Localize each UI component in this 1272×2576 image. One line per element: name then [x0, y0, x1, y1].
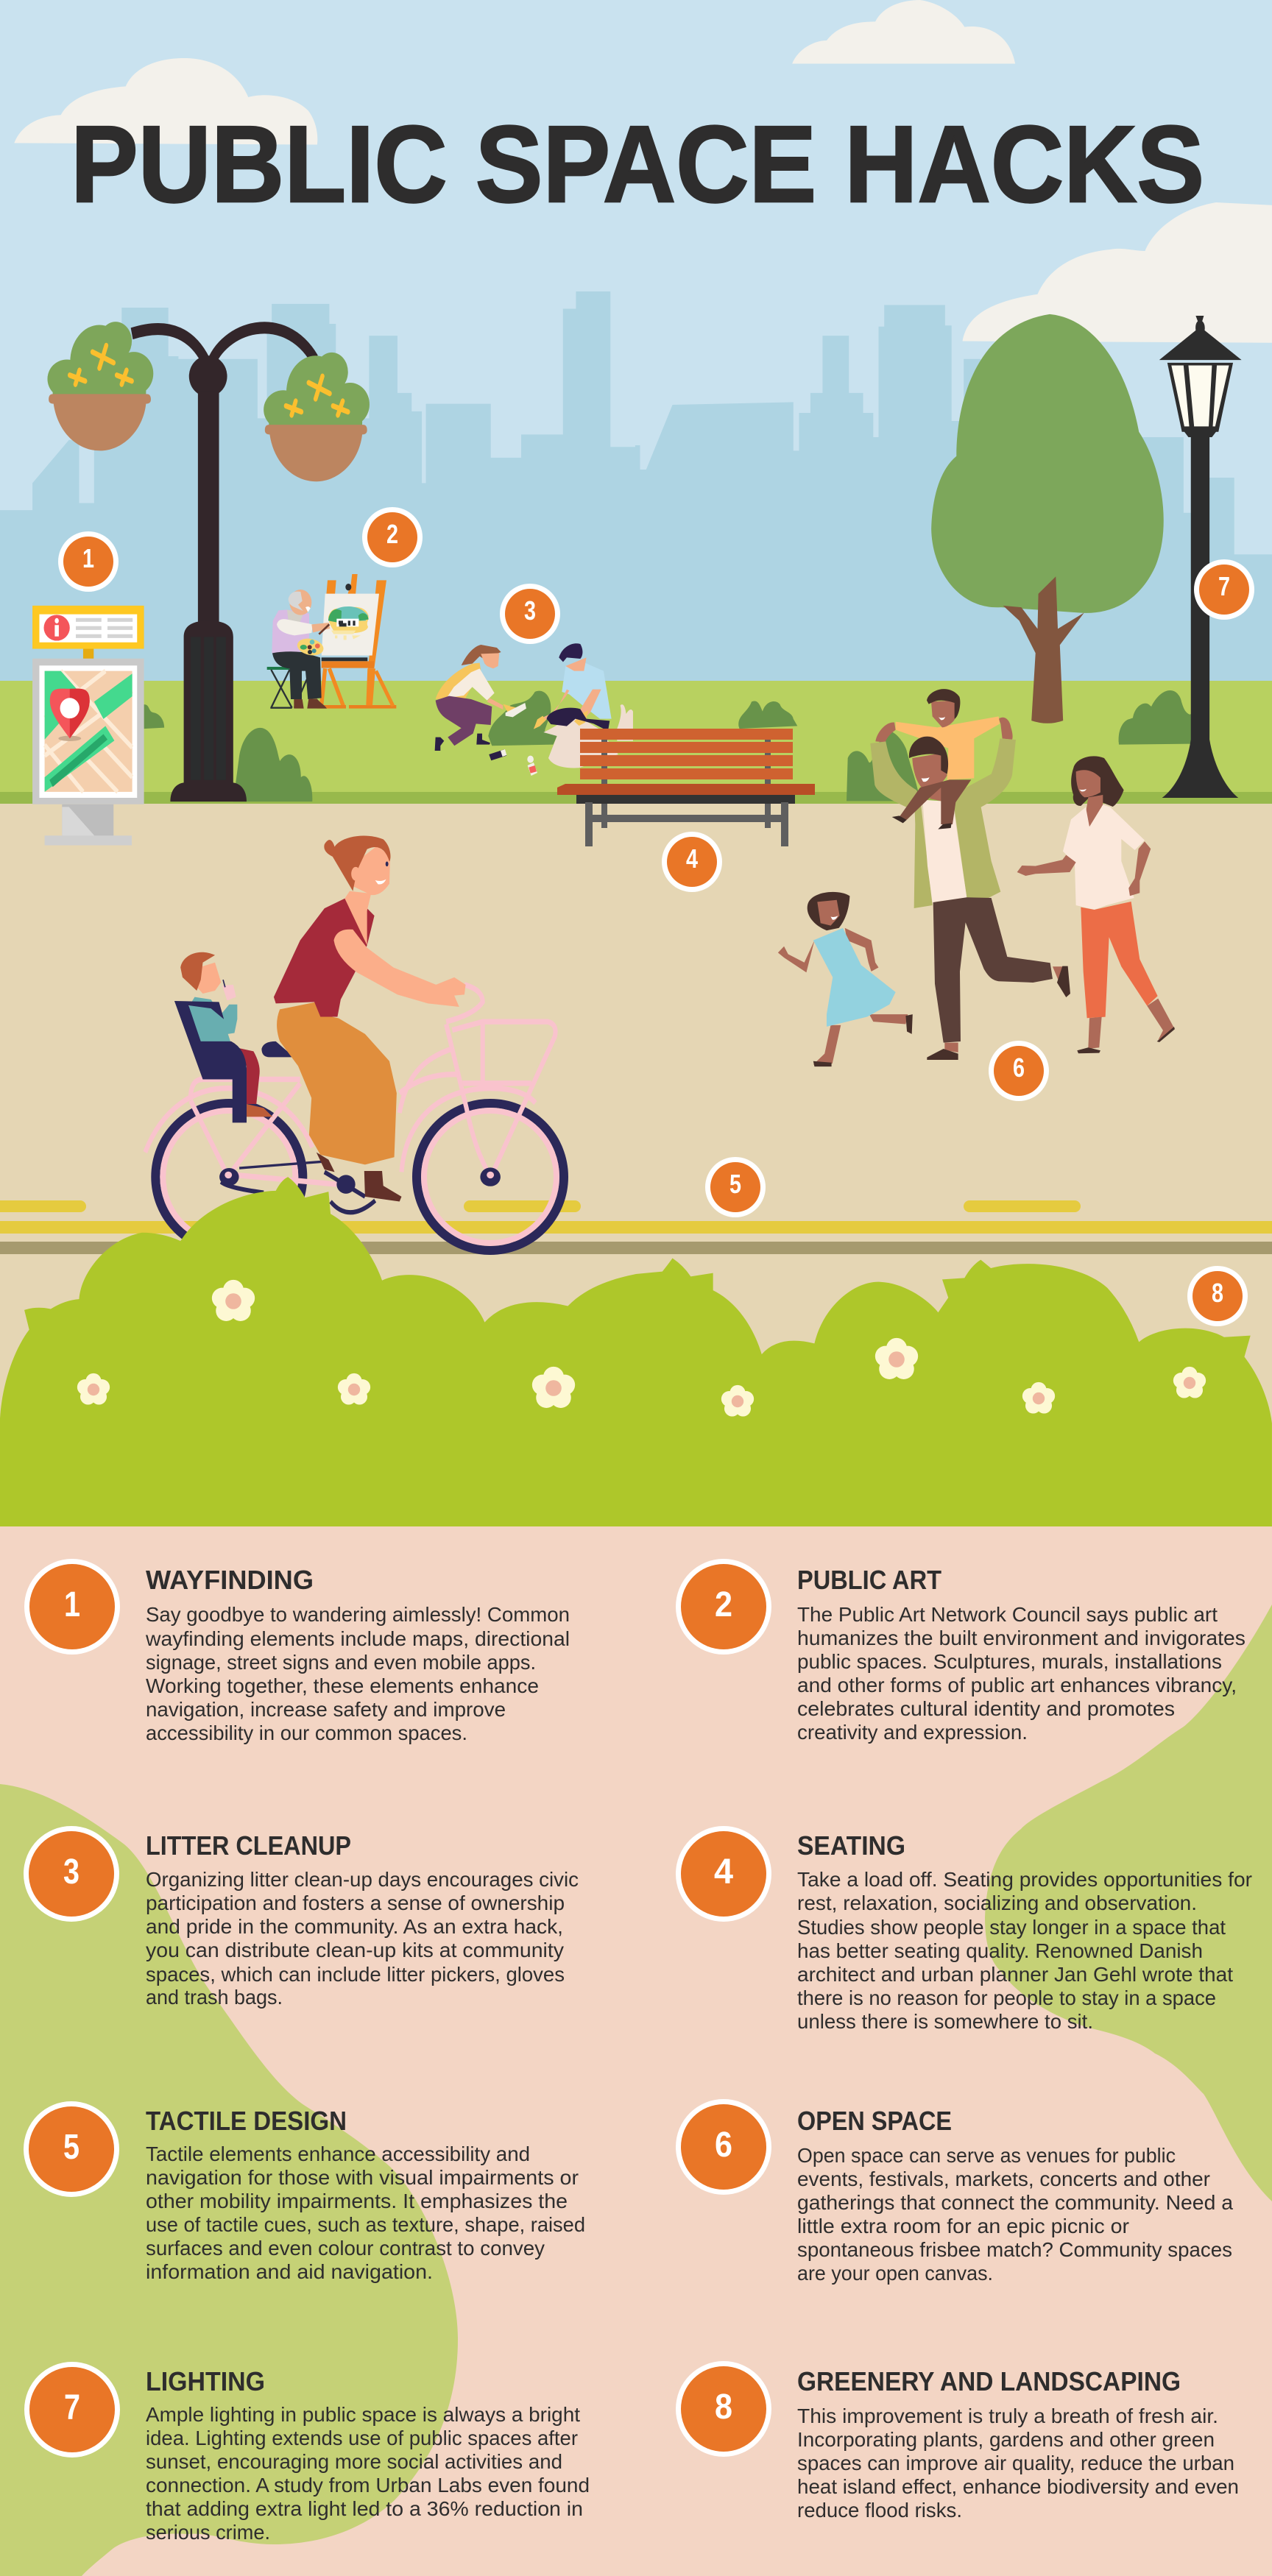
- scene marker 8: 8: [1212, 1278, 1223, 1308]
- body text: and other forms of public art enhances vibrancy,: [797, 1674, 1237, 1696]
- badge 4: [676, 1826, 771, 1922]
- body text: participation and fosters a sense of ownership: [146, 1892, 565, 1914]
- body text: public spaces. Sculptures, murals, installations: [797, 1650, 1222, 1673]
- badge 1: [24, 1559, 120, 1655]
- painter at easel: [267, 574, 396, 709]
- badge 5: 5: [63, 2128, 80, 2167]
- body text: spontaneous frisbee match? Community spaces: [797, 2238, 1232, 2261]
- scene marker 6: [989, 1041, 1049, 1101]
- right lamp post: [1159, 316, 1242, 798]
- heading: TACTILE DESIGN: [146, 2106, 347, 2136]
- body text: little extra room for an epic picnic or: [797, 2215, 1129, 2237]
- panel: wayfinding: [24, 1559, 570, 1744]
- body text: Say goodbye to wandering aimlessly! Common: [146, 1603, 570, 1626]
- lower panel background: [0, 1526, 1272, 2576]
- body text: Organizing litter clean-up days encourages civic: [146, 1868, 579, 1891]
- scene marker 5: 5: [729, 1169, 741, 1199]
- badge 8: [676, 2361, 771, 2457]
- child legs: [900, 779, 971, 824]
- right green blob: [985, 1604, 1272, 2201]
- woman rider: [274, 836, 466, 1202]
- scene marker 5: [705, 1157, 766, 1217]
- chain and hubs: [219, 1161, 501, 1212]
- badge 2: [676, 1559, 771, 1655]
- badge 3: 3: [63, 1853, 80, 1892]
- body text: navigation for those with visual impairments or: [146, 2166, 579, 2189]
- badge 3: [24, 1826, 119, 1922]
- body text: signage, street signs and even mobile apps.: [146, 1651, 536, 1674]
- badge 8: 8: [715, 2388, 732, 2427]
- body text: and pride in the community. As an extra hack,: [146, 1915, 563, 1938]
- body text: navigation, increase safety and improve: [146, 1698, 506, 1721]
- father head: [909, 737, 948, 801]
- panel: public art: [676, 1559, 1246, 1744]
- body text: [797, 1868, 1252, 2033]
- panel: tactile design: [24, 2101, 585, 2283]
- heading: GREENERY AND LANDSCAPING: [797, 2366, 1181, 2396]
- body text: idea. Lighting extends use of public spaces after: [146, 2427, 578, 2449]
- body text: has better seating quality. Renowned Danish: [797, 1939, 1203, 1962]
- body text: connection. A study from Urban Labs even found: [146, 2474, 590, 2497]
- body text: [146, 2403, 590, 2544]
- body text: surfaces and even colour contrast to convey: [146, 2237, 545, 2260]
- scene marker 3: [500, 584, 560, 644]
- body text: Take a load off. Seating provides opportunities for: [797, 1868, 1252, 1891]
- badge 4: 4: [714, 1853, 733, 1892]
- yellow dashed line: [0, 1200, 1272, 1234]
- body text: Working together, these elements enhance: [146, 1674, 539, 1697]
- badge 5: [24, 2101, 119, 2197]
- panel: greenery and landscaping: [676, 2361, 1239, 2522]
- body text: reduce flood risks.: [797, 2499, 962, 2522]
- body text: accessibility in our common spaces.: [146, 1722, 467, 1744]
- left planter: [47, 322, 153, 450]
- scene marker 4: [662, 832, 722, 892]
- body text: information and aid navigation.: [146, 2260, 433, 2283]
- body text: gatherings that connect the community. Need a: [797, 2191, 1233, 2214]
- right planter: [264, 353, 370, 481]
- body text: The Public Art Network Council says public art: [797, 1603, 1218, 1626]
- body text: wayfinding elements include maps, directional: [145, 1627, 570, 1650]
- heading: OPEN SPACE: [797, 2106, 952, 2136]
- family playing: [870, 689, 1175, 1060]
- father jacket: [870, 738, 1016, 908]
- scene marker 8: [1187, 1266, 1248, 1326]
- tree: [931, 314, 1164, 723]
- body text: and trash bags.: [146, 1986, 283, 2009]
- body text: use of tactile cues, such as texture, shape, raised: [146, 2213, 585, 2236]
- scene marker 4: 4: [686, 843, 698, 874]
- body text: architect and urban planner Jan Gehl wrote that: [797, 1963, 1233, 1986]
- body text: Ample lighting in public space is always a bright: [146, 2403, 580, 2426]
- trash bags: [543, 704, 633, 768]
- body text: Incorporating plants, gardens and other green: [797, 2428, 1215, 2451]
- body text: celebrates cultural identity and promotes: [797, 1697, 1175, 1720]
- body text: Studies show people stay longer in a space that: [797, 1916, 1226, 1939]
- scene marker 7: 7: [1218, 571, 1230, 601]
- bushes on lawn: [144, 690, 1192, 802]
- bicycle wheels: [155, 1103, 564, 1250]
- road edge band: [0, 1242, 1272, 1254]
- scene marker 7: [1194, 559, 1254, 620]
- panel: open space: [676, 2099, 1233, 2285]
- body text: Open space can serve as venues for public: [797, 2144, 1176, 2167]
- heading: LIGHTING: [146, 2366, 265, 2396]
- badge 7: [24, 2362, 120, 2458]
- father shirt: [922, 800, 967, 902]
- park bench: [557, 729, 815, 846]
- body text: that adding extra light led to a 36% reduction in: [146, 2497, 583, 2520]
- panel: lighting: [24, 2362, 590, 2544]
- body text: are your open canvas.: [797, 2262, 993, 2285]
- cyclist with child: [145, 836, 564, 1250]
- body text: [146, 2142, 585, 2283]
- father pants: [933, 897, 1053, 1043]
- bike seat: [261, 1041, 294, 1057]
- scene marker 2: 2: [386, 519, 398, 549]
- heading: WAYFINDING: [146, 1565, 314, 1595]
- body text: sunset, encouraging more social activities and: [146, 2450, 562, 2473]
- body text: unless there is somewhere to sit.: [797, 2010, 1093, 2033]
- man with gloves: [534, 643, 612, 731]
- badge 2: 2: [715, 1585, 732, 1624]
- bicycle frame: [145, 985, 556, 1184]
- body text: [797, 2144, 1233, 2285]
- woman with bottle: [435, 645, 526, 751]
- scene marker 6: 6: [1013, 1052, 1025, 1083]
- body text: heat island effect, enhance biodiversity and even: [797, 2475, 1239, 2498]
- badge 6: [676, 2099, 771, 2195]
- body text: humanizes the built environment and invigorates: [797, 1627, 1246, 1649]
- child on shoulders: [875, 689, 1013, 779]
- heading: SEATING: [797, 1830, 905, 1861]
- grass lawn: [0, 681, 1272, 806]
- badge 1: 1: [64, 1585, 80, 1624]
- panel: seating: [676, 1826, 1252, 2033]
- body text: spaces, which can include litter pickers, gloves: [146, 1963, 565, 1986]
- scene marker 1: 1: [82, 543, 94, 573]
- body text: other mobility impairments. It emphasizes the: [146, 2190, 568, 2212]
- scene marker 2: [362, 507, 423, 567]
- heading: LITTER CLEANUP: [146, 1830, 351, 1861]
- badge 6: 6: [715, 2126, 732, 2165]
- badge 7: 7: [64, 2388, 80, 2427]
- body text: [797, 2405, 1239, 2522]
- body text: [797, 1603, 1246, 1744]
- body text: [146, 1868, 579, 2009]
- scene marker 3: 3: [524, 595, 536, 626]
- city skyline: [0, 291, 1272, 685]
- running girl: [778, 892, 913, 1066]
- body text: you can distribute clean-up kits at community: [146, 1939, 564, 1961]
- litter on the ground: [489, 749, 537, 776]
- body text: serious crime.: [146, 2521, 270, 2544]
- body text: events, festivals, markets, concerts and other: [797, 2168, 1210, 2190]
- road surface: [0, 804, 1272, 1532]
- child on bike seat: [174, 952, 272, 1122]
- body text: spaces can improve air quality, reduce the urban: [797, 2452, 1234, 2474]
- scene marker 1: [58, 531, 119, 592]
- sky background: [0, 0, 1272, 810]
- flowering hedge: [0, 1177, 1272, 1529]
- panel: litter cleanup: [24, 1826, 579, 2009]
- body text: [145, 1603, 570, 1744]
- body text: Tactile elements enhance accessibility and: [146, 2142, 530, 2165]
- litter cleanup volunteers: [435, 643, 633, 776]
- left green blob: [0, 1784, 458, 2576]
- body text: there is no reason for people to stay in a space: [797, 1986, 1216, 2009]
- mother: [1017, 756, 1175, 1053]
- wayfinding kiosk: [32, 606, 144, 846]
- title: PUBLIC SPACE HACKS: [71, 104, 1204, 225]
- grass edge strip: [0, 792, 1272, 806]
- street lamp with planters: [47, 322, 370, 802]
- heading: PUBLIC ART: [797, 1565, 941, 1595]
- father feet: [944, 966, 1064, 1052]
- body text: creativity and expression.: [797, 1721, 1028, 1744]
- clouds: [14, 0, 1272, 343]
- body text: rest, relaxation, socializing and observation.: [797, 1892, 1197, 1914]
- body text: This improvement is truly a breath of fresh air.: [797, 2405, 1218, 2427]
